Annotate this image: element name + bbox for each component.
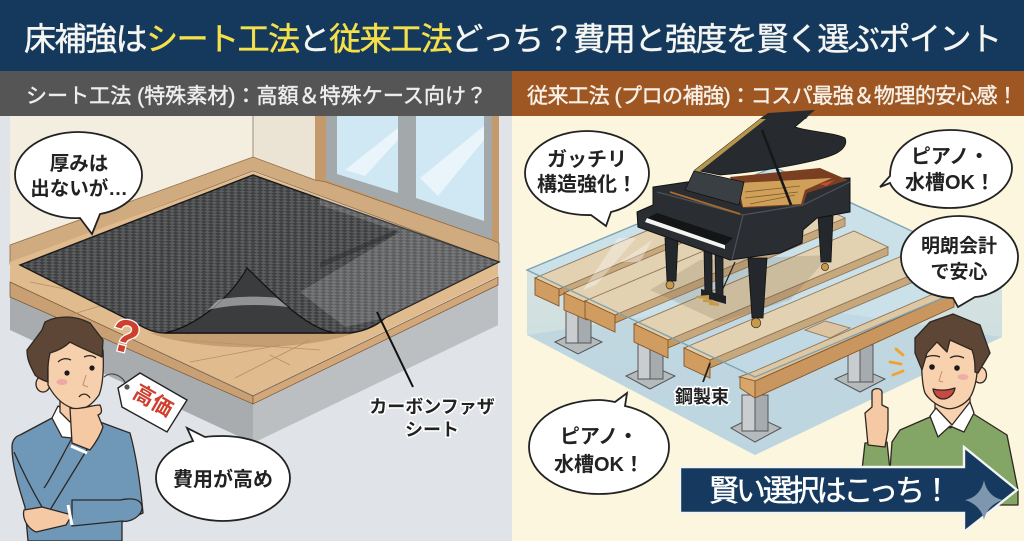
subheader: sheet method: シート工法 (特殊素材)：高額＆特殊ケース向け？ (26, 85, 487, 108)
sparkle marks (890, 349, 903, 375)
thumbs up (865, 389, 888, 447)
post 2 (626, 343, 675, 389)
collar (52, 406, 80, 438)
speech bubble: structure (525, 131, 649, 226)
post 4 (835, 345, 885, 392)
speech bubble: piano ok upper: 水槽OK！ (905, 171, 995, 194)
man: worried (12, 317, 143, 541)
keyboard (645, 213, 733, 249)
mouth (933, 388, 955, 399)
leader line: steel post (703, 363, 710, 382)
post 3 (731, 395, 781, 442)
interior (730, 168, 848, 208)
question mark: ? (106, 307, 145, 365)
title band: 床補強はシート工法と従来工法どっち？費用と強度を賢く選ぶポイント (24, 21, 1002, 57)
face (922, 340, 977, 409)
panel: conventional method (512, 110, 1024, 541)
speech bubble: thickness (15, 132, 142, 234)
glass highlights (583, 238, 652, 290)
room walls (10, 116, 319, 266)
window (315, 116, 499, 248)
lid (695, 110, 846, 175)
glass top (527, 167, 1002, 377)
panel: sheet method (0, 116, 512, 541)
arrow callout: 賢い選択はこっち！ (709, 475, 952, 508)
eyes, brows, mouth (64, 365, 95, 376)
eyes and brows (929, 364, 960, 371)
speech bubble: structure: ガッチリ (547, 148, 627, 171)
title band (0, 0, 1024, 71)
speech bubble: thickness: 厚みは (50, 153, 108, 175)
timber joists (535, 185, 954, 398)
grand piano (637, 110, 850, 328)
subheader: conventional method (512, 71, 1024, 116)
neck (60, 398, 84, 422)
hair (27, 317, 103, 382)
price tag (104, 373, 187, 432)
arrow callout (680, 447, 1017, 532)
music desk (685, 171, 744, 205)
sweater (12, 418, 143, 541)
steel posts (555, 305, 885, 442)
label: steel post: 鋼製束 (675, 387, 729, 407)
hair (915, 314, 990, 373)
hand on arm (24, 507, 72, 532)
piano shadow (650, 255, 830, 322)
speech bubble: thickness: 出ないが… (30, 177, 128, 200)
label: carbon fiber sheet: シート (405, 420, 459, 440)
speech bubble: clear pricing (901, 216, 1018, 307)
subheader: sheet method (0, 71, 512, 116)
man: smiling (862, 314, 1018, 505)
speech bubble: piano ok upper: ピアノ・ (911, 145, 989, 168)
label: carbon fiber sheet (369, 397, 495, 440)
pedals (696, 289, 726, 306)
slab (10, 277, 498, 443)
speech bubble: piano ok lower: ピアノ・ (560, 425, 638, 448)
speech bubble: clear pricing: で安心 (930, 261, 988, 283)
collar (930, 402, 974, 437)
floor shadow box (527, 270, 1002, 455)
label: carbon fiber sheet: カーボンファザ (369, 397, 495, 417)
speech bubble: piano ok lower (529, 393, 669, 494)
speech bubble: cost (156, 428, 290, 521)
castors (666, 263, 829, 328)
leader line: carbon sheet (377, 312, 413, 387)
hand on chin (70, 405, 103, 450)
face (48, 342, 103, 409)
fallboard strip (670, 192, 740, 214)
body (637, 178, 850, 260)
legs (665, 216, 833, 318)
speech bubble: structure: 構造強化！ (537, 173, 637, 196)
wood floor (10, 172, 498, 404)
neck (935, 398, 970, 428)
carbon fiber sheet (20, 175, 499, 333)
arm (862, 442, 890, 470)
piano lid overlap (760, 110, 815, 119)
sweater (890, 413, 1018, 505)
icon: sparkle (965, 480, 1003, 520)
speech bubble: cost: 費用が高め (173, 467, 273, 491)
speech bubble: clear pricing: 明朗会計 (921, 234, 997, 257)
speech bubble: piano ok upper (880, 130, 1012, 208)
subheader: conventional method: 従来工法 (プロの補強)：コスパ最強＆物理的安心感！ (527, 85, 1018, 108)
ear (36, 376, 50, 392)
ear (974, 367, 986, 383)
lid prop (762, 130, 791, 205)
speech bubble: piano ok lower: 水槽OK！ (554, 453, 644, 476)
price tag: 高価 (129, 381, 177, 422)
post 1 (555, 305, 602, 354)
arm (14, 438, 88, 510)
baseboard (10, 157, 499, 264)
